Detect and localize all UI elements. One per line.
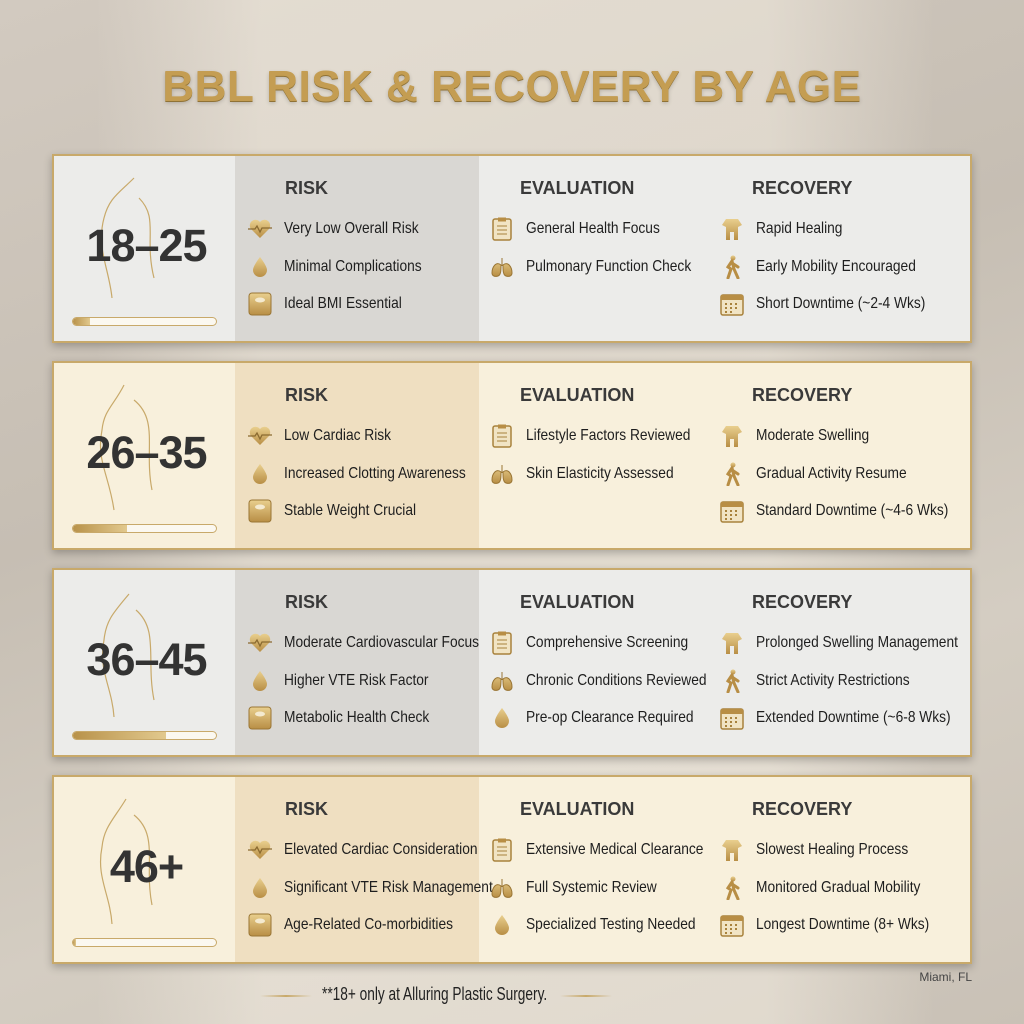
card: 46+ — [52, 775, 972, 964]
recovery item — [726, 876, 920, 900]
risk item — [253, 257, 422, 277]
recovery item — [720, 708, 951, 730]
recovery item: Longest Downtime (8+ Wks) — [756, 916, 929, 933]
age label: 36–45 — [86, 634, 207, 685]
recovery item: Early Mobility Encouraged — [756, 258, 916, 275]
risk item — [253, 671, 429, 691]
recovery item — [726, 670, 910, 693]
recovery item: Extended Downtime (~6-8 Wks) — [756, 709, 951, 726]
risk item — [248, 500, 416, 522]
recovery item — [722, 219, 842, 240]
recovery item: Strict Activity Restrictions — [756, 672, 910, 689]
risk item: Increased Clotting Awareness — [284, 465, 466, 482]
risk item: Elevated Cardiac Consideration — [284, 841, 478, 858]
risk item — [248, 914, 453, 936]
heading: evaluation: EVALUATION — [520, 799, 634, 819]
heading: recovery: RECOVERY — [752, 799, 852, 819]
evaluation item: Lifestyle Factors Reviewed — [526, 427, 690, 444]
body figure outline — [100, 798, 153, 924]
heading: risk: RISK — [285, 799, 328, 819]
evaluation item: Specialized Testing Needed — [526, 916, 696, 933]
evaluation item: Full Systemic Review — [526, 879, 657, 896]
recovery item: Moderate Swelling — [756, 427, 869, 444]
risk item: Stable Weight Crucial — [284, 502, 416, 519]
heading: risk: RISK — [285, 178, 328, 198]
progress bar — [72, 938, 217, 947]
recovery item: Prolonged Swelling Management — [756, 634, 958, 651]
body figure outline — [102, 594, 155, 717]
recovery item: Standard Downtime (~4-6 Wks) — [756, 502, 948, 519]
heading: risk: RISK — [285, 592, 328, 612]
heading: risk: RISK — [285, 385, 328, 405]
recovery item: Gradual Activity Resume — [756, 465, 907, 482]
evaluation item: Pulmonary Function Check — [526, 258, 691, 275]
recovery item — [726, 256, 916, 279]
risk item: Ideal BMI Essential — [284, 295, 402, 312]
evaluation item: Comprehensive Screening — [526, 634, 688, 651]
recovery item: Slowest Healing Process — [756, 841, 908, 858]
risk item: Very Low Overall Risk — [284, 220, 419, 237]
recovery item — [720, 501, 948, 523]
risk item: Minimal Complications — [284, 258, 422, 275]
heading: recovery: RECOVERY — [752, 178, 852, 198]
recovery item — [720, 294, 925, 316]
risk item: Higher VTE Risk Factor — [284, 672, 429, 689]
card: 18-25 — [52, 154, 972, 343]
body figure outline — [101, 178, 154, 298]
evaluation item — [492, 218, 660, 241]
risk item — [248, 706, 430, 730]
recovery item — [722, 426, 869, 447]
recovery item — [722, 840, 908, 861]
recovery item — [722, 633, 958, 654]
footer disclaimer: **18+ only at Alluring Plastic Surgery. — [322, 984, 547, 1004]
age label: 18–25 — [86, 220, 207, 271]
risk item — [248, 292, 402, 316]
evaluation item — [492, 632, 688, 655]
recovery item — [720, 915, 929, 937]
title: BBL RISK & RECOVERY BY AGE — [162, 62, 862, 111]
heading: recovery: RECOVERY — [752, 385, 852, 405]
progress bar — [72, 317, 217, 326]
age label: 26–35 — [86, 427, 207, 478]
recovery item: Short Downtime (~2-4 Wks) — [756, 295, 925, 312]
progress bar — [72, 524, 217, 533]
evaluation item: Extensive Medical Clearance — [526, 841, 703, 858]
risk item: Metabolic Health Check — [284, 709, 429, 726]
age label: 46+ — [110, 841, 183, 892]
evaluation item: Pre-op Clearance Required — [526, 709, 694, 726]
evaluation item — [492, 424, 690, 448]
evaluation item — [492, 838, 703, 862]
heading: recovery: RECOVERY — [752, 592, 852, 612]
risk item: Low Cardiac Risk — [284, 427, 391, 444]
heading: evaluation: EVALUATION — [520, 385, 634, 405]
risk item: Significant VTE Risk Management — [284, 879, 493, 896]
heading: evaluation: EVALUATION — [520, 592, 634, 612]
body figure outline — [100, 384, 153, 510]
evaluation item: Chronic Conditions Reviewed — [526, 672, 707, 689]
card: 36-45 — [52, 568, 972, 757]
evaluation item: Skin Elasticity Assessed — [526, 465, 674, 482]
evaluation item: General Health Focus — [526, 220, 660, 237]
recovery item: Monitored Gradual Mobility — [756, 879, 920, 896]
progress bar — [72, 731, 217, 740]
risk item: Age-Related Co-morbidities — [284, 916, 453, 933]
card: 26-35 — [52, 361, 972, 550]
recovery item: Rapid Healing — [756, 220, 842, 237]
heading: evaluation: EVALUATION — [520, 178, 634, 198]
risk item — [248, 426, 391, 445]
risk item: Moderate Cardiovascular Focus — [284, 634, 479, 651]
location note: Miami, FL — [919, 970, 972, 984]
recovery item — [726, 462, 907, 486]
